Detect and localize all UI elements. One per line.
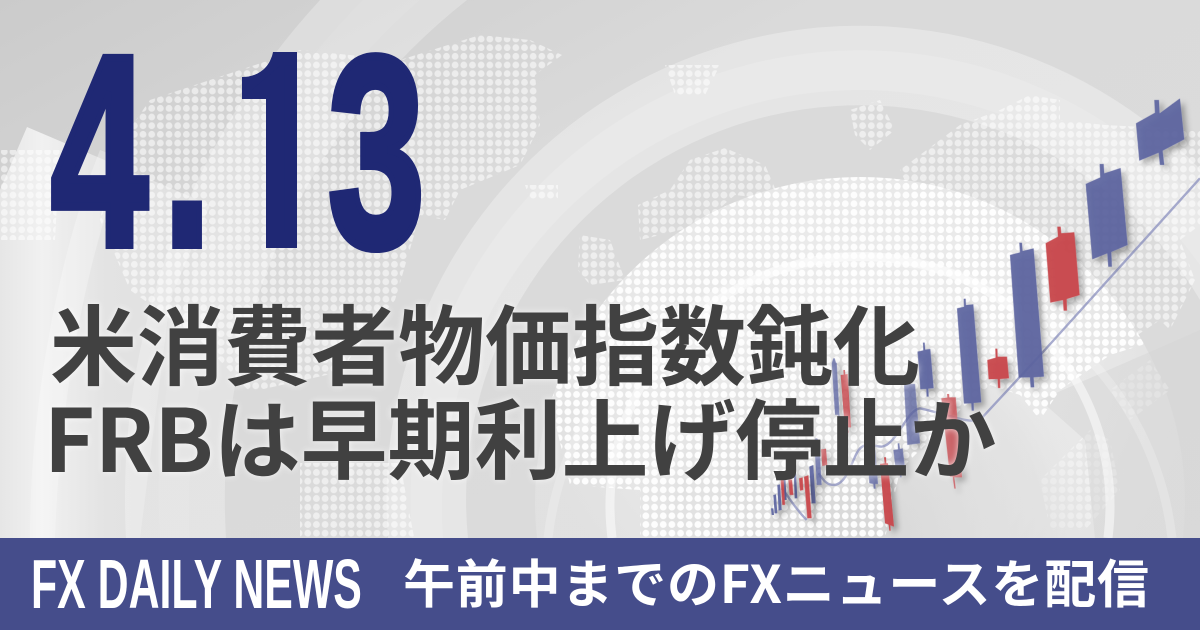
footer brand text: FX DAILY NEWS	[31, 545, 362, 623]
outer arc band	[125, 0, 467, 538]
globe core shading	[610, 256, 1110, 538]
date heading: 3	[328, 1, 425, 304]
trend line	[782, 178, 1200, 520]
headline line 2: FRBは早期利上げ停止か	[44, 372, 996, 498]
footer band	[0, 538, 1200, 630]
white globe	[535, 177, 1185, 538]
date heading	[51, 52, 422, 253]
headline line 1: 米消費者物価指数鈍化	[50, 278, 920, 404]
inner rings	[610, 256, 1110, 538]
light wedge at lower left	[0, 127, 210, 538]
red candles	[781, 227, 1080, 531]
footer tagline: 午前中までのFXニュースを配信	[403, 543, 1150, 618]
main ring	[386, 26, 1200, 538]
blue candles	[771, 98, 1184, 515]
date heading: 4	[51, 0, 148, 303]
date heading: .	[163, 0, 211, 303]
bright dotted map	[552, 177, 1144, 536]
date heading: 1	[226, 0, 343, 308]
